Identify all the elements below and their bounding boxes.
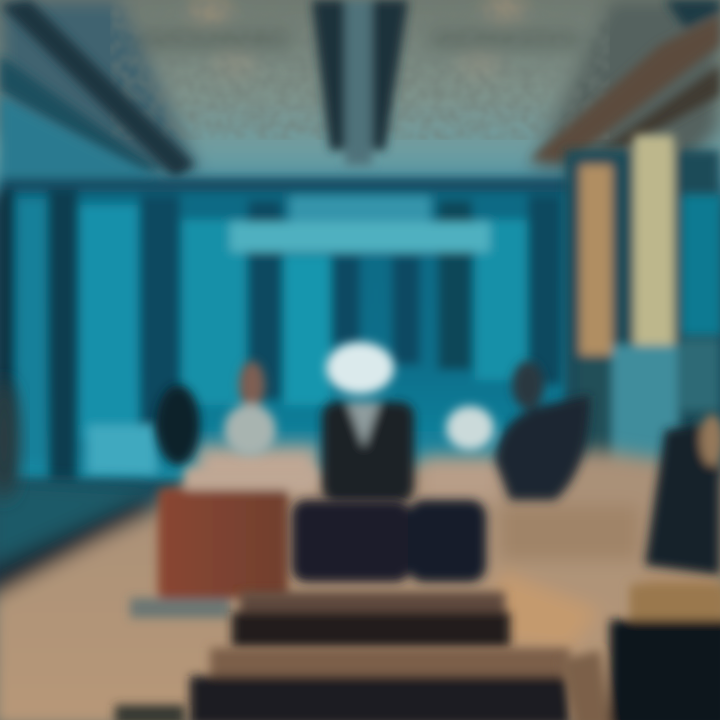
person: left seated in white bbox=[224, 361, 276, 456]
chair: bottom right dark bbox=[115, 585, 720, 720]
people bbox=[156, 342, 720, 575]
table: lower bench bbox=[190, 648, 570, 720]
window wall bbox=[0, 95, 580, 480]
person: right dark seated bbox=[495, 361, 590, 500]
left edge figure bbox=[0, 380, 20, 500]
person: left dark silhouette bbox=[156, 385, 200, 465]
ceiling texture bbox=[110, 0, 610, 140]
person: far right dark bbox=[645, 425, 720, 575]
desk: red wood bbox=[130, 468, 315, 618]
person: centre with white head bbox=[322, 342, 414, 502]
person: right white bbox=[446, 406, 494, 450]
right pillars and window bbox=[565, 135, 720, 510]
floor bbox=[0, 445, 720, 720]
ceiling bbox=[0, 0, 720, 195]
chairs: centre dark bbox=[292, 500, 486, 582]
table: upper bench bbox=[232, 592, 510, 648]
ceiling beams bbox=[0, 0, 720, 178]
